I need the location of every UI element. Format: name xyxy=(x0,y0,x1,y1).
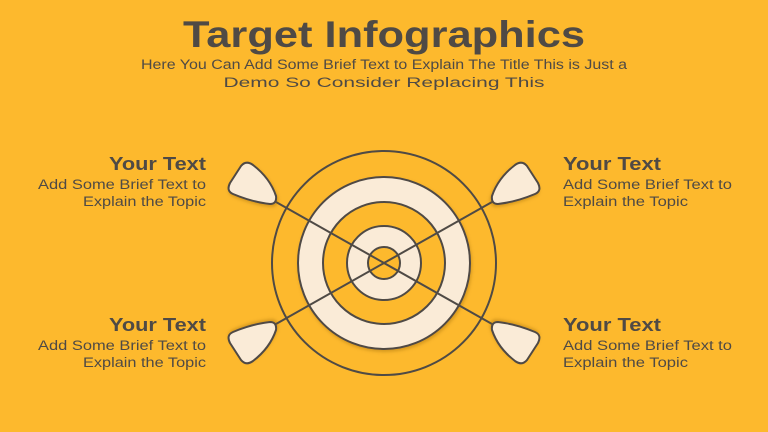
text block: top-left xyxy=(38,154,206,209)
text block: bottom-right xyxy=(563,315,732,370)
text block: bottom-left: Your Text xyxy=(109,315,206,335)
subtitle: Here You Can Add Some Brief Text to Explain The Title This is Just a xyxy=(141,57,628,72)
subtitle xyxy=(141,57,628,90)
text block: bottom-right: Explain the Topic xyxy=(563,355,688,370)
text block: top-left: Explain the Topic xyxy=(83,194,206,209)
icon: fletching bottom-left xyxy=(229,322,276,363)
arrows xyxy=(229,163,539,363)
target xyxy=(272,151,496,375)
text block: top-right: Your Text xyxy=(563,154,661,174)
subtitle: Demo So Consider Replacing This xyxy=(224,75,545,90)
text block: top-left: Your Text xyxy=(109,154,206,174)
text block: bottom-left xyxy=(38,315,206,370)
text block: bottom-right: Your Text xyxy=(563,315,661,335)
text block: top-left: Add Some Brief Text to xyxy=(38,177,206,192)
text block: bottom-left: Explain the Topic xyxy=(83,355,206,370)
icon: fletching bottom-right xyxy=(492,322,539,363)
title: Target Infographics xyxy=(183,14,585,55)
text block: bottom-left: Add Some Brief Text to xyxy=(38,338,206,353)
text block: top-right: Add Some Brief Text to xyxy=(563,177,732,192)
text block: top-right: Explain the Topic xyxy=(563,194,688,209)
icon: fletching top-left xyxy=(229,163,276,204)
text block: top-right xyxy=(563,154,732,209)
icon: fletching top-right xyxy=(492,163,539,204)
text block: bottom-right: Add Some Brief Text to xyxy=(563,338,732,353)
